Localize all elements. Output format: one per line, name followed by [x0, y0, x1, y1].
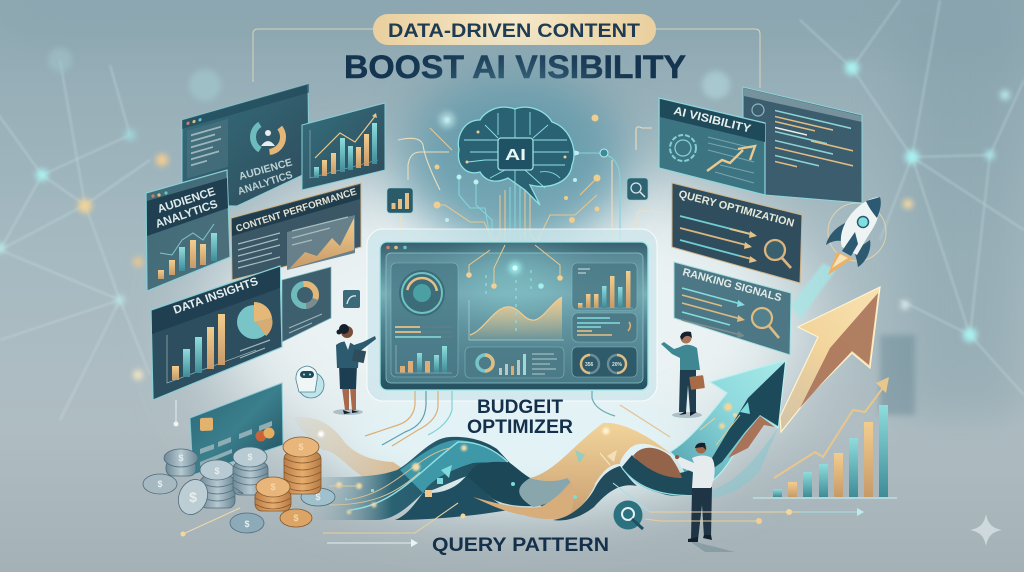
bar chart panel	[572, 263, 637, 310]
panel: audience analytics front	[146, 170, 230, 291]
magnifier badge	[614, 500, 643, 530]
teal growth arrow	[670, 360, 786, 498]
card tether line	[174, 400, 178, 426]
ribbon: flowing data stream	[313, 423, 712, 520]
circuit nodes	[434, 112, 608, 223]
coin currency symbols: $	[293, 513, 299, 523]
panel: pie chart	[282, 267, 331, 342]
small chart icon	[387, 188, 413, 213]
man with briefcase	[661, 332, 705, 418]
coin currency symbols: $	[247, 452, 253, 462]
panel: content performance	[231, 183, 361, 280]
budget optimizer label: OPTIMIZER	[467, 417, 573, 438]
panel: AI visibility front: AI VISIBILITY	[672, 105, 752, 136]
large gold growth arrow	[780, 287, 880, 432]
bottom right bar chart	[753, 335, 915, 498]
coin currency symbols: $	[270, 482, 276, 492]
panel: ranking signals: RANKING SIGNALS	[681, 266, 783, 304]
rocket	[791, 197, 886, 320]
flow arrow heads and glowing dots	[180, 403, 864, 547]
panel: audience analytics front: AUDIENCE	[156, 186, 217, 216]
ring gauges panel: 356	[585, 362, 594, 368]
coin currency symbols: $	[214, 466, 220, 476]
magnifier icon	[627, 178, 648, 200]
brain with AI chip: AI	[505, 147, 526, 164]
man pointing at ribbon	[675, 442, 735, 552]
robot mascot	[296, 366, 324, 398]
ring gauges panel: 20%	[612, 362, 623, 368]
coin currency symbols: $	[178, 453, 184, 463]
credit card	[190, 383, 283, 475]
ribbon: faint gold back	[293, 417, 405, 477]
panel: data insights	[151, 266, 282, 400]
monitor glass frame	[367, 229, 657, 401]
gold coin stacks	[255, 437, 321, 527]
bottom summary panel	[465, 347, 564, 378]
coin currency symbols: $	[315, 492, 321, 502]
background network right	[702, 0, 1024, 395]
panel: data insights: DATA INSIGHTS	[172, 276, 260, 317]
heading pill: DATA-DRIVEN CONTENT	[388, 21, 640, 42]
coin currency symbols: $	[157, 479, 163, 489]
circuit endpoints on monitor	[466, 245, 563, 335]
panel: query optimization	[672, 183, 802, 283]
silver coin stacks	[143, 447, 335, 533]
brain with AI chip	[458, 107, 574, 205]
circuit traces to monitor	[392, 127, 666, 300]
coin currency symbols: $	[189, 489, 197, 505]
presenter woman	[333, 324, 376, 415]
panel: audience analytics back: ANALYTICS	[236, 169, 294, 198]
main dashboard monitor	[380, 242, 648, 390]
area chart	[469, 297, 564, 340]
coin currency symbols	[157, 442, 321, 529]
query pattern label: QUERY PATTERN	[432, 535, 609, 556]
gauge panel	[391, 263, 458, 377]
panel: AI visibility back	[743, 87, 862, 203]
panel: audience analytics back	[182, 84, 309, 206]
panel: ranking signals	[674, 262, 791, 355]
background network left	[0, 48, 221, 420]
budget optimizer label: BUDGEIT	[477, 397, 563, 418]
title: BOOST AI VISIBILITY	[344, 49, 686, 85]
panel: query optimization: QUERY OPTIMIZATION	[677, 188, 796, 230]
ring gauges panel	[572, 347, 637, 377]
brain halo	[400, 75, 630, 245]
coin currency symbols: $	[298, 442, 304, 452]
panel: AI visibility front	[659, 98, 765, 195]
panel: audience analytics back: AUDIENCE	[238, 156, 294, 183]
panel: content performance: CONTENT PERFORMANCE	[235, 186, 358, 235]
connector lines from the heading	[253, 29, 760, 88]
bars list panel	[572, 313, 637, 342]
budget optimizer label	[467, 397, 573, 438]
sparkle mark	[970, 514, 1002, 546]
coin currency symbols: $	[244, 519, 250, 529]
traces under monitor	[365, 391, 670, 446]
heading pill	[373, 14, 656, 45]
small arrow icon	[343, 290, 360, 308]
panel: audience analytics front: ANALYTICS	[154, 198, 220, 231]
panel: small line and bar chart	[302, 103, 385, 190]
bottom flow arrows	[183, 418, 860, 543]
